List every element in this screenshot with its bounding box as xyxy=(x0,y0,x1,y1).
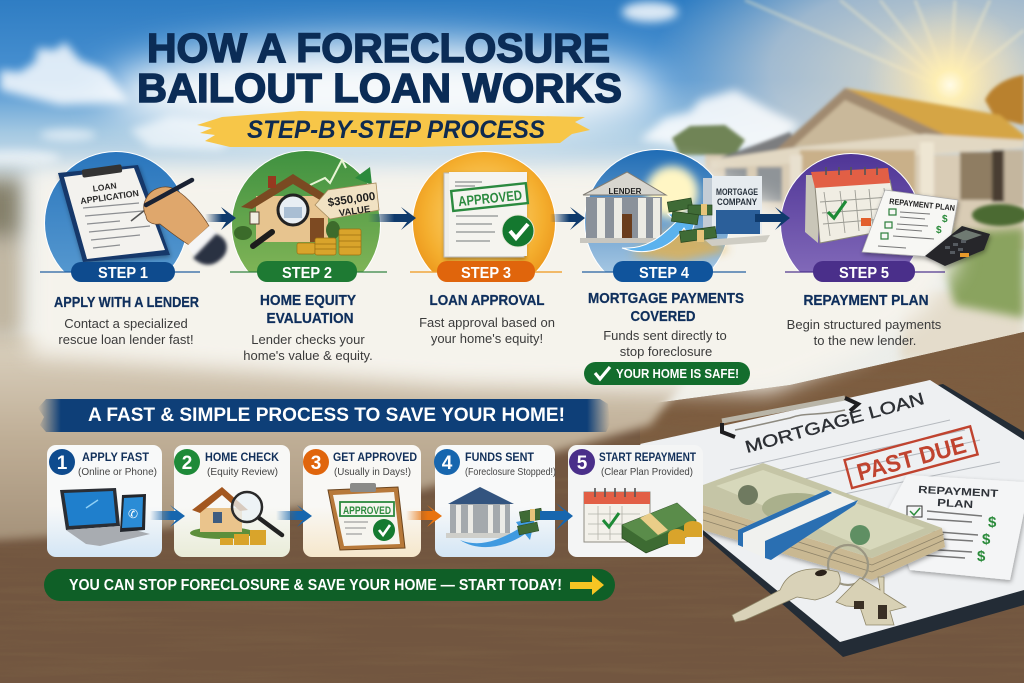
background: title glow xyxy=(105,42,665,142)
panel: step 2 xyxy=(230,150,387,363)
background: blurred house xyxy=(672,75,1024,250)
icon: bank and money xyxy=(446,487,543,547)
heading: repayment plan: REPAYMENT PLAN xyxy=(804,293,928,309)
document: mortgage loan sheet: MORTGAGE LOAN xyxy=(743,389,926,457)
text: step 5 description: Begin structured payments xyxy=(787,317,942,332)
label: start repayment: START REPAYMENT xyxy=(599,452,696,464)
call to action: start today: YOU CAN STOP FORECLOSURE & SAVE YOUR HOME — START TODAY! xyxy=(69,577,562,594)
text: step 1 description xyxy=(58,316,194,347)
icon: house value evaluation: VALUE xyxy=(338,204,371,219)
note: repayment plan xyxy=(888,475,1024,580)
cash stack xyxy=(703,463,945,580)
label: home check: (Equity Review) xyxy=(207,466,278,478)
stamp: past due: PAST DUE xyxy=(854,432,969,487)
badge: step 3: STEP 3 xyxy=(461,265,511,282)
panel: summary card 2 xyxy=(174,445,290,557)
panel: step 5 xyxy=(780,153,990,348)
text: step 4 description: Funds sent directly to xyxy=(603,328,727,343)
text: step 4 description xyxy=(603,328,727,359)
label: start repayment xyxy=(599,452,696,478)
label: apply fast xyxy=(78,452,157,478)
panel: summary card 5 xyxy=(568,445,703,557)
icon: lender paying mortgage company xyxy=(580,149,770,272)
number badge 2: 2 xyxy=(182,453,192,474)
badge: step 3 xyxy=(410,261,562,282)
label: funds sent: (Foreclosure Stopped!) xyxy=(465,466,556,478)
note: repayment plan: REPAYMENT xyxy=(918,484,999,500)
heading: loan approval: LOAN APPROVAL xyxy=(430,293,545,309)
panel: step 1 xyxy=(40,151,227,347)
title xyxy=(137,25,622,111)
document: mortgage loan sheet xyxy=(640,380,1024,642)
text: step 3 description: Fast approval based on xyxy=(419,315,555,330)
background: wooden table xyxy=(0,320,1024,683)
label: start repayment: (Clear Plan Provided) xyxy=(601,466,693,478)
note: repayment plan: $ xyxy=(988,514,997,531)
icon: house value evaluation: $350,000 xyxy=(327,191,376,209)
background: blurred tabletop haze on the left xyxy=(0,335,720,540)
background: sky xyxy=(0,0,1024,400)
icon: lender paying mortgage company: LENDER xyxy=(609,187,642,196)
text: step 1 description: rescue loan lender fast! xyxy=(58,332,194,347)
text: step 5 description xyxy=(787,317,942,348)
icon: approved document xyxy=(412,151,556,272)
icon: approved document: APPROVED xyxy=(457,187,523,209)
heading: mortgage payments covered: COVERED xyxy=(630,309,696,325)
icon: lender paying mortgage company: MORTGAGE xyxy=(716,187,758,197)
arrow: card 3 to 4 xyxy=(406,505,442,527)
call to action: start today xyxy=(44,569,615,601)
icon: lender paying mortgage company: COMPANY xyxy=(717,197,757,207)
label: get approved: (Usually in Days!) xyxy=(334,466,411,478)
badge: step 4 xyxy=(582,261,746,282)
badge: step 4: STEP 4 xyxy=(639,265,689,282)
heading: home equity evaluation xyxy=(260,293,356,327)
callout: your home is safe xyxy=(584,362,750,385)
text: step 3 description: your home's equity! xyxy=(431,331,543,346)
number badge 1: 1 xyxy=(57,453,68,474)
background: sandy ground under the lawn xyxy=(900,290,1024,360)
label: home check: HOME CHECK xyxy=(205,452,280,464)
label: apply fast: (Online or Phone) xyxy=(78,466,157,478)
note: repayment plan: PLAN xyxy=(937,497,973,511)
panel: summary card 1 xyxy=(47,445,162,557)
panel: step 4 xyxy=(580,149,770,385)
text: step 2 description xyxy=(243,332,373,363)
text: step 3 description xyxy=(419,315,555,346)
background: left haze xyxy=(0,178,25,340)
panel: summary card 3 xyxy=(303,445,421,557)
heading: mortgage payments covered: MORTGAGE PAYMENTS xyxy=(588,291,744,307)
note: repayment plan: $ xyxy=(977,548,986,565)
metal clip xyxy=(722,398,858,437)
background: lawn and shrub xyxy=(930,204,1024,318)
badge: step 1: STEP 1 xyxy=(98,265,148,282)
number badge 3: 3 xyxy=(311,453,321,474)
background: sunlit haze xyxy=(650,0,1024,220)
label: get approved: GET APPROVED xyxy=(333,452,417,464)
clipboard board xyxy=(640,384,1024,657)
icon: calendar and cash xyxy=(584,488,702,553)
arrow: step 2 to 3 xyxy=(368,207,416,230)
badge: step 2: STEP 2 xyxy=(282,265,332,282)
icon: calendar, repayment plan and calculator xyxy=(780,153,992,272)
icon: calendar, repayment plan and calculator: $ xyxy=(942,214,948,225)
arrow: card 1 to 2 xyxy=(150,505,185,527)
background: cream fog behind steps xyxy=(30,168,960,392)
heading: mortgage payments covered xyxy=(588,291,744,325)
arrow: step 4 to 5 xyxy=(755,207,790,230)
heading: home equity evaluation: HOME EQUITY xyxy=(260,293,356,309)
arrow: step 3 to 4 xyxy=(550,207,585,230)
subtitle with yellow brush: STEP-BY-STEP PROCESS xyxy=(247,116,545,144)
icon: loan application clipboard xyxy=(44,151,227,295)
title: BAILOUT LOAN WORKS xyxy=(137,65,622,111)
photo: clipboard, cash and keys on table xyxy=(640,380,1024,657)
text: step 2 description: Lender checks your xyxy=(251,332,365,347)
icon: laptop and phone: ✆ xyxy=(128,507,138,521)
arrow: step 1 to 2 xyxy=(205,207,236,230)
title: HOW A FORECLOSURE xyxy=(147,25,610,71)
heading: home equity evaluation: EVALUATION xyxy=(266,311,354,327)
background: clouds xyxy=(0,2,800,166)
label: home check xyxy=(205,452,280,478)
banner: fast and simple process xyxy=(38,399,610,432)
text: step 5 description: to the new lender. xyxy=(814,333,916,348)
text: step 2 description: home's value & equity. xyxy=(243,348,373,363)
heading: apply with a lender: APPLY WITH A LENDER xyxy=(54,295,199,311)
text: step 1 description: Contact a specialized xyxy=(64,316,188,331)
icon: approved clipboard: APPROVED xyxy=(343,505,391,517)
badge: step 1 xyxy=(40,262,200,282)
callout: your home is safe: YOUR HOME IS SAFE! xyxy=(616,366,739,381)
banner: fast and simple process: A FAST & SIMPLE PROCESS TO SAVE YOUR HOME! xyxy=(88,404,565,426)
arrow: yellow xyxy=(570,575,604,595)
number badge 4: 4 xyxy=(442,453,453,474)
arrow: card 2 to 3 xyxy=(276,505,312,527)
keys with house keychain xyxy=(732,545,906,625)
icon: house, magnifier and coins xyxy=(190,487,282,545)
number badge 5: 5 xyxy=(577,453,588,474)
icon: calendar, repayment plan and calculator: REPAYMENT PLAN xyxy=(889,197,955,213)
panel: step 3 xyxy=(410,151,562,346)
icon: loan application clipboard: APPLICATION xyxy=(80,188,139,206)
background: sun and rays xyxy=(745,0,1024,170)
arrow: card 4 to 5 xyxy=(540,503,573,530)
badge: step 5: STEP 5 xyxy=(839,265,889,282)
badge: step 5 xyxy=(785,261,945,282)
label: funds sent xyxy=(465,452,556,478)
icon: house value evaluation xyxy=(231,150,381,272)
subtitle with yellow brush xyxy=(197,111,590,147)
panel: summary card 4 xyxy=(434,445,556,557)
label: apply fast: APPLY FAST xyxy=(82,452,149,464)
icon: calendar, repayment plan and calculator: $ xyxy=(936,225,942,236)
icon: loan application clipboard: LOAN xyxy=(92,180,117,194)
text: step 4 description: stop foreclosure xyxy=(620,344,712,359)
label: funds sent: FUNDS SENT xyxy=(465,452,534,464)
badge: step 2 xyxy=(230,261,387,282)
label: get approved xyxy=(333,452,417,478)
note: repayment plan: $ xyxy=(982,531,991,548)
